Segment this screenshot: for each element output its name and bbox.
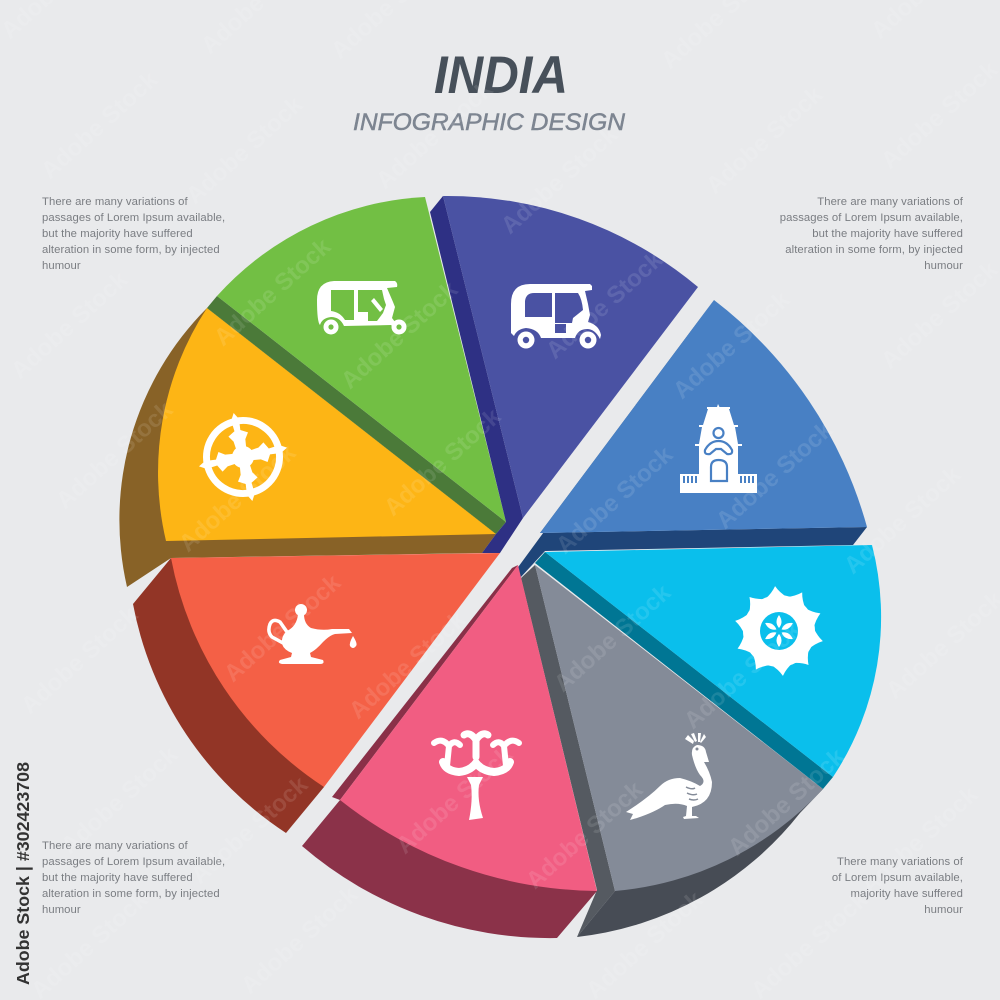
- text block: top right: humour: [924, 260, 963, 272]
- watermarks: Adobe Stock: [6, 266, 134, 384]
- watermarks: Adobe Stock: [336, 276, 464, 394]
- text block: top left: but the majority have suffered: [42, 228, 193, 240]
- icon: temple: [680, 404, 757, 493]
- text block: bottom right: [832, 856, 964, 916]
- text block: top left: alteration in some form, by injected: [42, 244, 220, 256]
- watermarks: Adobe Stock: [711, 416, 839, 534]
- watermarks: Adobe Stock: [36, 66, 164, 184]
- slice: gray with side wall: [521, 565, 823, 937]
- watermarks: Adobe Stock: [856, 781, 984, 899]
- watermarks: Adobe Stock: [521, 776, 649, 894]
- watermarks: Adobe Stock: [679, 616, 807, 734]
- title: INDIA: [434, 46, 568, 105]
- icon: front rickshaw: [511, 284, 601, 339]
- text block: top right: [780, 196, 964, 272]
- watermarks: Adobe Stock: [551, 441, 679, 559]
- icon: genie lamp: [269, 604, 357, 664]
- slice: red with side wall: [133, 553, 500, 833]
- text block: bottom left: passages of Lorem Ipsum available,: [42, 856, 225, 868]
- text block: bottom right: majority have suffered: [851, 888, 963, 900]
- watermarks: Adobe Stock: [209, 233, 337, 351]
- icon: trident: [434, 734, 519, 820]
- watermarks: Adobe Stock: [344, 606, 472, 724]
- text block: top right: There are many variations of: [817, 196, 964, 208]
- text block: bottom left: alteration in some form, by injected: [42, 888, 220, 900]
- icon: compass wheel: [190, 404, 296, 510]
- text block: top right: alteration in some form, by injected: [785, 244, 963, 256]
- icon: lotus sun: [733, 585, 825, 677]
- watermarks: Adobe Stock: [876, 56, 1000, 174]
- text block: bottom right: There many variations of: [837, 856, 964, 868]
- watermarks: Adobe Stock: [16, 601, 144, 719]
- slice: pink with side wall: [302, 565, 597, 938]
- watermarks: Adobe Stock: [379, 403, 507, 521]
- slice: yellow with side wall: [119, 308, 496, 587]
- slice: green with divider wall: [207, 197, 506, 534]
- watermarks: Adobe Stock: [701, 81, 829, 199]
- subtitle: INFOGRAPHIC DESIGN: [353, 109, 626, 136]
- text block: top left: passages of Lorem Ipsum available,: [42, 212, 225, 224]
- watermarks: Adobe Stock: [496, 121, 624, 239]
- watermarks: Adobe Stock: [174, 439, 302, 557]
- watermarks: Adobe Stock: [723, 743, 851, 861]
- text block: bottom right: of Lorem Ipsum available,: [832, 872, 963, 884]
- watermarks: Adobe Stock: [236, 881, 364, 999]
- watermarks: Adobe Stock: [876, 256, 1000, 374]
- stock id label: Adobe Stock | #302423708: [13, 762, 33, 985]
- text block: top left: There are many variations of: [42, 196, 189, 208]
- watermarks: Adobe Stock: [56, 741, 184, 859]
- text block: top right: but the majority have suffered: [812, 228, 963, 240]
- watermarks: Adobe Stock: [51, 396, 179, 514]
- text block: bottom left: [42, 840, 225, 916]
- watermarks: Adobe Stock: [668, 286, 796, 404]
- text block: bottom left: but the majority have suffered: [42, 872, 193, 884]
- watermarks: Adobe Stock: [549, 579, 677, 697]
- text block: top right: passages of Lorem Ipsum available,: [780, 212, 963, 224]
- watermarks: Adobe Stock: [186, 771, 314, 889]
- slice: cyan with divider wall: [535, 545, 881, 789]
- icon: front rickshaw wheels: [518, 332, 596, 348]
- text block: bottom left: humour: [42, 904, 81, 916]
- watermarks: Adobe Stock: [219, 569, 347, 687]
- text block: bottom left: There are many variations of: [42, 840, 189, 852]
- icon: rickshaw wheels and handle: [324, 298, 406, 334]
- icon: peacock: [626, 733, 712, 820]
- watermarks: Adobe Stock: [839, 461, 967, 579]
- slice: blue with side wall: [516, 300, 867, 578]
- watermarks: Adobe Stock: [391, 741, 519, 859]
- icon: side rickshaw: [317, 281, 401, 331]
- text block: top left: [42, 196, 225, 272]
- text block: bottom right: humour: [924, 904, 963, 916]
- watermarks: Adobe Stock: [371, 76, 499, 194]
- text block: top left: humour: [42, 260, 81, 272]
- watermarks: Adobe Stock: [181, 91, 309, 209]
- slice: navy with side wall: [430, 196, 698, 553]
- watermarks: Adobe Stock: [541, 246, 669, 364]
